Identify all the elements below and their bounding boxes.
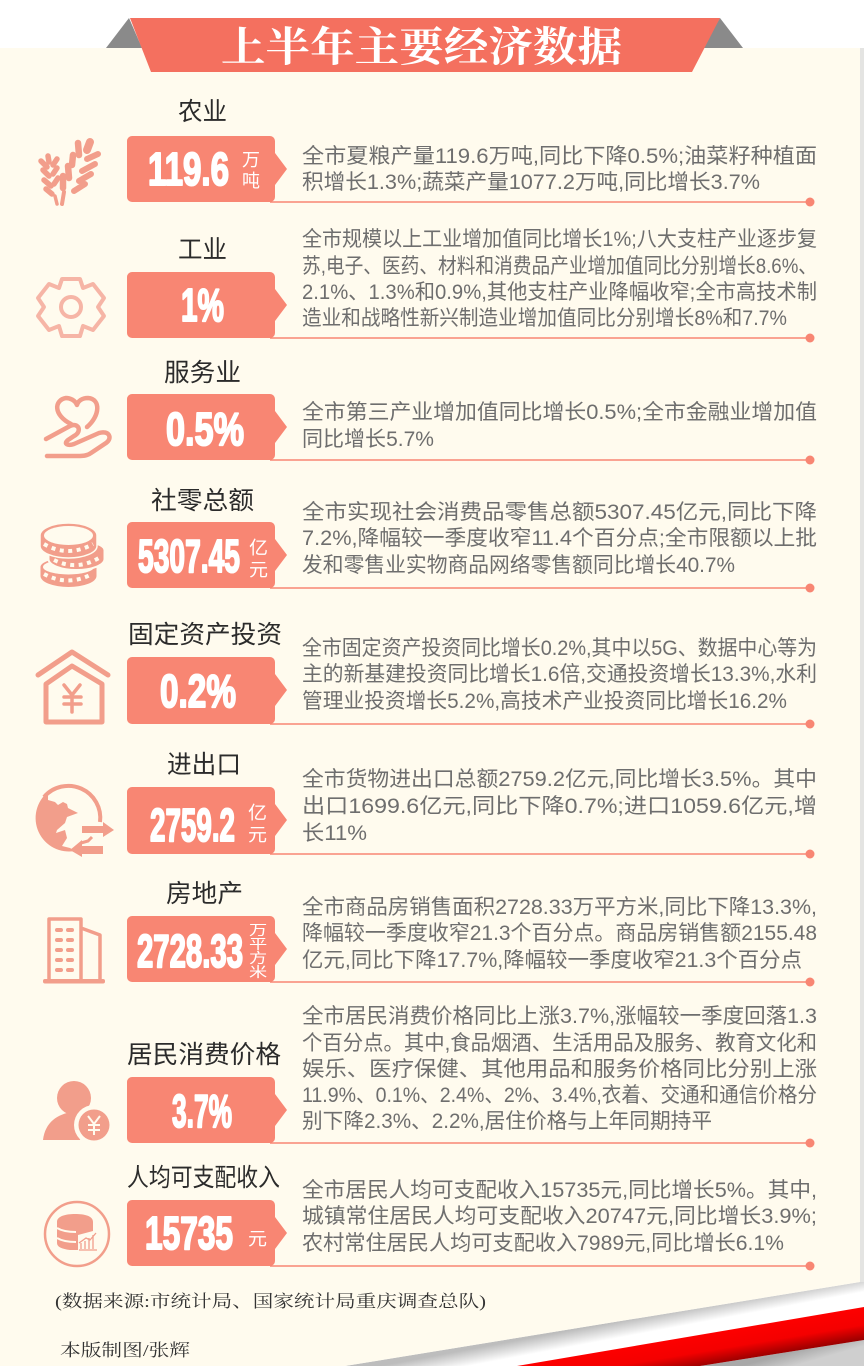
- text block: 2.1%、1.3%和0.9%,其他支柱产业降幅收窄;全市高技术制: [302, 281, 817, 304]
- value box: 15735: 15735: [145, 1207, 233, 1259]
- text block: 出口1699.6亿元,同比下降0.7%;进口1059.6亿元,增: [302, 795, 817, 818]
- panel: 居民消费价格: [43, 1005, 817, 1148]
- icon: building: [43, 919, 105, 984]
- panel: 工业: [38, 228, 817, 342]
- text block: 亿元,同比下降17.7%,降幅较一季度收窄21.3个百分点: [302, 949, 802, 972]
- title: 上半年主要经济数据: [221, 24, 622, 70]
- text block: 城镇常住居民人均可支配收入20747元,同比增长3.9%;: [302, 1205, 817, 1228]
- heading: 房地产: 房地产: [166, 880, 243, 908]
- text block: 全市夏粮产量119.6万吨,同比下降0.5%;油菜籽种植面: [302, 145, 817, 168]
- value box: 1%: [127, 272, 287, 338]
- text block: 全市实现社会消费品零售总额5307.45亿元,同比下降: [302, 501, 817, 524]
- value box: 0.2%: [127, 657, 287, 724]
- value box: 3.7%: [127, 1077, 287, 1143]
- text block: 主的新基建投资同比增长1.6倍,交通投资增长13.3%,水利: [302, 663, 817, 686]
- text block: 7.2%,降幅较一季度收窄11.4个百分点;全市限额以上批: [302, 527, 817, 550]
- value box: 2759.2: 2759.2: [150, 799, 235, 851]
- divider line with dot: [270, 1138, 814, 1148]
- value box: 2759.2: 元: [248, 825, 267, 845]
- value box: 2728.33: [127, 916, 287, 982]
- text block: [302, 228, 817, 330]
- text block: [302, 637, 817, 713]
- icon: wheat: [41, 142, 98, 204]
- value box: 0.5%: 0.5%: [166, 403, 244, 455]
- icon: coins: [40, 523, 104, 587]
- value box: 15735: 元: [248, 1229, 267, 1249]
- icon: database with chart: [45, 1202, 109, 1266]
- divider line with dot: [270, 720, 814, 728]
- panel: 服务业: [46, 359, 817, 464]
- text block: 造业和战略性新兴制造业增加值同比分别增长8%和7.7%: [302, 307, 787, 330]
- value box: 119.6: [127, 136, 287, 202]
- heading: 服务业: 服务业: [164, 359, 241, 387]
- text block: 个百分点。其中,食品烟酒、生活用品及服务、教育文化和: [302, 1032, 817, 1055]
- value box: 3.7%: 3.7%: [172, 1085, 232, 1137]
- text block: [302, 768, 817, 845]
- icon: house with yen: [38, 652, 108, 722]
- divider line with dot: [270, 978, 814, 986]
- panel: 房地产: [43, 880, 817, 986]
- value box: 15735: [127, 1200, 287, 1266]
- value box: 5307.45: 5307.45: [138, 530, 240, 582]
- credit: 本版制图/张辉: [60, 1340, 190, 1360]
- text block: [302, 1179, 817, 1255]
- value box: 2759.2: 亿: [248, 803, 267, 823]
- value box: 0.5%: [127, 394, 287, 460]
- text block: 全市规模以上工业增加值同比增长1%;八大支柱产业逐步复: [302, 228, 817, 251]
- value box: 2759.2: [127, 787, 287, 854]
- source note: (数据来源:市统计局、国家统计局重庆调查总队): [55, 1292, 486, 1311]
- panel: 社零总额: [40, 487, 817, 592]
- divider line with dot: [270, 850, 814, 858]
- text block: 农村常住居民人均可支配收入7989元,同比增长6.1%: [302, 1232, 784, 1255]
- text block: 别下降2.3%、2.2%,居住价格与上年同期持平: [302, 1110, 712, 1133]
- value box: 2728.33: 万: [249, 923, 267, 938]
- value box: 119.6: 119.6: [148, 143, 229, 195]
- text block: [302, 401, 817, 451]
- text block: [302, 1005, 817, 1133]
- text block: 全市第三产业增加值同比增长0.5%;全市金融业增加值: [302, 401, 817, 424]
- text block: [302, 145, 817, 194]
- heading: 社零总额: 社零总额: [151, 487, 254, 515]
- panel: 进出口: [36, 751, 817, 858]
- text block: 苏,电子、医药、材料和消费品产业增加值同比分别增长8.6%、: [302, 255, 817, 278]
- text block: [302, 501, 817, 577]
- value box: 2728.33: 平: [249, 937, 267, 952]
- text block: 全市固定资产投资同比增长0.2%,其中以5G、数据中心等为: [302, 637, 817, 660]
- value box: 119.6: 吨: [242, 171, 260, 191]
- divider line with dot: [270, 584, 814, 592]
- value box: 119.6: 万: [242, 150, 260, 170]
- panel: 固定资产投资: [38, 621, 817, 728]
- divider line with dot: [270, 456, 814, 464]
- heading: 固定资产投资: 固定资产投资: [128, 621, 282, 649]
- heading: 工业: 工业: [178, 236, 227, 264]
- value box: 2728.33: 方: [249, 951, 267, 966]
- value box: 5307.45: [127, 522, 287, 588]
- text block: 长11%: [302, 822, 367, 845]
- value box: 5307.45: 亿: [249, 538, 268, 558]
- text block: 发和零售业实物商品网络零售额同比增长40.7%: [302, 554, 735, 577]
- text block: 11.9%、0.1%、2.4%、2%、3.4%,衣着、交通和通信价格分: [302, 1084, 817, 1107]
- icon: person with yen coin: [43, 1081, 114, 1145]
- heading: 居民消费价格: 居民消费价格: [127, 1041, 281, 1069]
- panel: 人均可支配收入: [45, 1164, 817, 1270]
- heading: 农业: 农业: [178, 98, 227, 126]
- value box: 2728.33: 米: [249, 965, 267, 980]
- divider line with dot: [270, 198, 814, 206]
- icon: globe with arrows: [36, 786, 114, 857]
- text block: 管理业投资增长5.2%,高技术产业投资同比增长16.2%: [302, 690, 787, 713]
- divider line with dot: [270, 1262, 814, 1270]
- text block: 积增长1.3%;蔬菜产量1077.2万吨,同比增长3.7%: [302, 171, 760, 194]
- text block: 全市居民人均可支配收入15735元,同比增长5%。其中,: [302, 1179, 817, 1202]
- divider line with dot: [270, 334, 814, 342]
- value box: 5307.45: 元: [249, 560, 268, 580]
- text block: [302, 896, 817, 972]
- text block: 全市居民消费价格同比上涨3.7%,涨幅较一季度回落1.3: [302, 1005, 817, 1028]
- text block: 全市货物进出口总额2759.2亿元,同比增长3.5%。其中: [302, 768, 817, 791]
- heading: 进出口: 进出口: [167, 751, 241, 779]
- value box: 1%: 1%: [181, 279, 224, 331]
- icon: gear: [38, 279, 104, 336]
- text block: 降幅较一季度收窄21.3个百分点。商品房销售额2155.48: [302, 922, 817, 945]
- heading: 人均可支配收入: 人均可支配收入: [127, 1164, 280, 1192]
- text block: 全市商品房销售面积2728.33万平方米,同比下降13.3%,: [302, 896, 817, 919]
- panel: 农业: [41, 98, 817, 206]
- text block: 同比增长5.7%: [302, 428, 434, 451]
- value box: 2728.33: 2728.33: [137, 925, 243, 977]
- icon: hand holding heart: [46, 398, 110, 456]
- title ribbon: [106, 18, 743, 72]
- value box: 0.2%: 0.2%: [160, 665, 236, 717]
- text block: 娱乐、医疗保健、其他用品和服务价格同比分别上涨: [302, 1058, 817, 1081]
